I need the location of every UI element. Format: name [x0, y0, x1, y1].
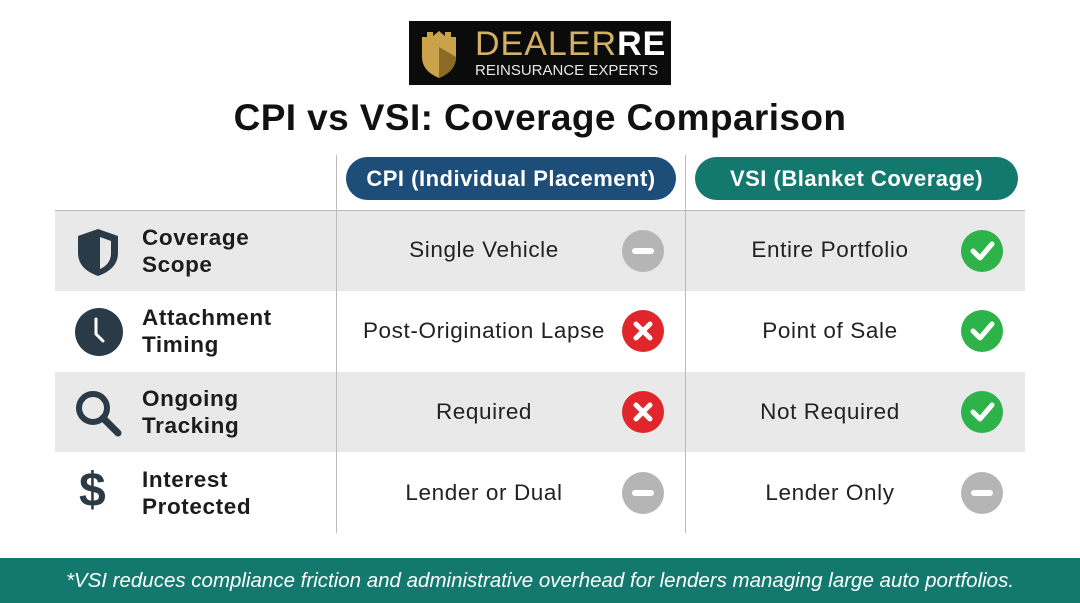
row: ongoing tracking: Tracking — [142, 413, 239, 438]
row: interest protected: Interest — [142, 467, 228, 492]
row: interest protected: Lender or Dual — [405, 480, 563, 505]
row: attachment timing: Post-Origination Lapse — [363, 318, 605, 343]
row: coverage scope — [55, 211, 1025, 291]
row: coverage scope: Scope — [142, 252, 213, 277]
header: VSI: VSI (Blanket Coverage) — [730, 166, 983, 191]
row: ongoing tracking: Required — [436, 399, 532, 424]
row: coverage scope: Coverage — [142, 225, 249, 250]
row: interest protected: Protected — [142, 494, 251, 519]
footer note — [0, 558, 1080, 603]
row: attachment timing: Timing — [142, 332, 219, 357]
logo: DEALERRE — [475, 25, 666, 63]
row: attachment timing: Point of Sale — [762, 318, 898, 343]
icon: gold shield — [422, 31, 456, 78]
title: CPI vs VSI: Coverage Comparison — [234, 97, 846, 138]
row: coverage scope: Single Vehicle — [409, 237, 559, 262]
footer note: *VSI reduces compliance friction and administrative overhead for lenders managing large auto portfolios. — [66, 569, 1014, 592]
icon: magnifier — [76, 391, 122, 436]
row: ongoing tracking: Not Required — [760, 399, 900, 424]
row: attachment timing — [55, 291, 1025, 371]
row: interest protected — [55, 453, 1025, 533]
icon: dollar: $ — [79, 464, 106, 517]
row: interest protected: Lender Only — [765, 480, 895, 505]
icon: clock — [75, 308, 123, 356]
header: VSI — [695, 157, 1018, 200]
icon: shield — [78, 229, 118, 276]
logo: REINSURANCE EXPERTS — [475, 62, 658, 79]
row: ongoing tracking: Ongoing — [142, 386, 239, 411]
row: coverage scope: Entire Portfolio — [751, 237, 909, 262]
logo — [409, 21, 671, 85]
header: CPI: CPI (Individual Placement) — [366, 166, 656, 191]
row: ongoing tracking — [55, 372, 1025, 452]
row: attachment timing: Attachment — [142, 305, 272, 330]
header: CPI — [346, 157, 676, 200]
